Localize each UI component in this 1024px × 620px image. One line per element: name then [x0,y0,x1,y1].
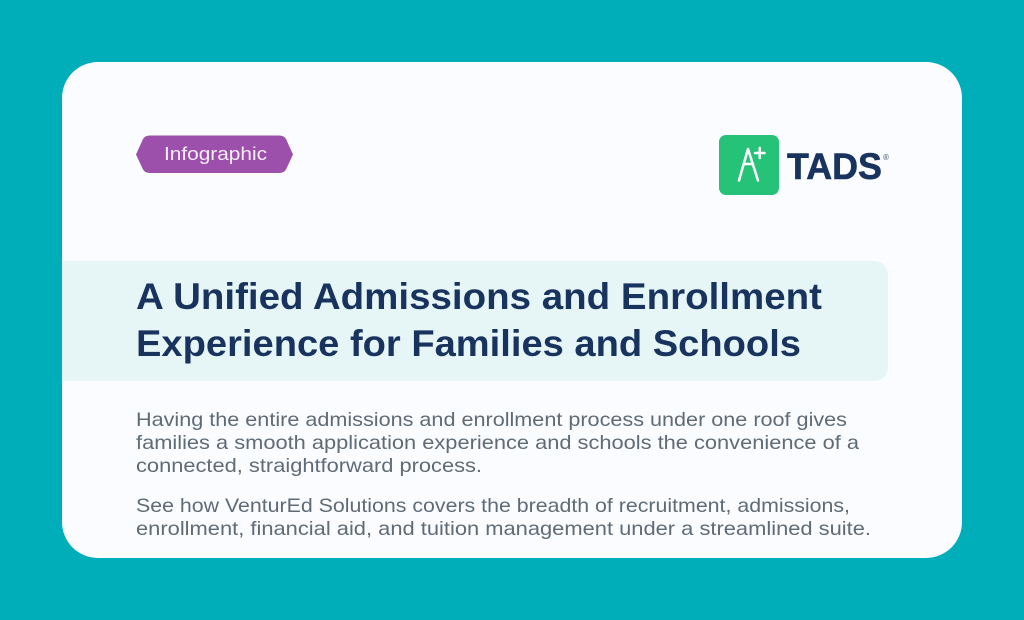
text block: intro paragraph: connected, straightforward process. [136,455,482,477]
panel: main card [62,62,962,558]
tag: Infographic: Infographic [164,144,267,164]
text block: second paragraph: enrollment, financial aid, and tuition management under a streamlined suite. [136,518,871,540]
icon: A+ green square [719,135,779,195]
tag: Infographic [136,136,293,173]
logo: TADS [719,135,889,195]
text block: intro paragraph: Having the entire admissions and enrollment process under one roof gives [136,409,847,431]
title band [62,261,888,381]
title: Experience for Families and Schools [136,323,801,364]
text block: intro paragraph: families a smooth application experience and schools the convenience of a [136,432,859,454]
text block: second paragraph: See how VenturEd Solutions covers the breadth of recruitment, admissions, [136,495,850,517]
wordmark: TADS [787,145,882,187]
title: A Unified Admissions and Enrollment [136,276,822,317]
registered mark: ® [883,153,889,162]
